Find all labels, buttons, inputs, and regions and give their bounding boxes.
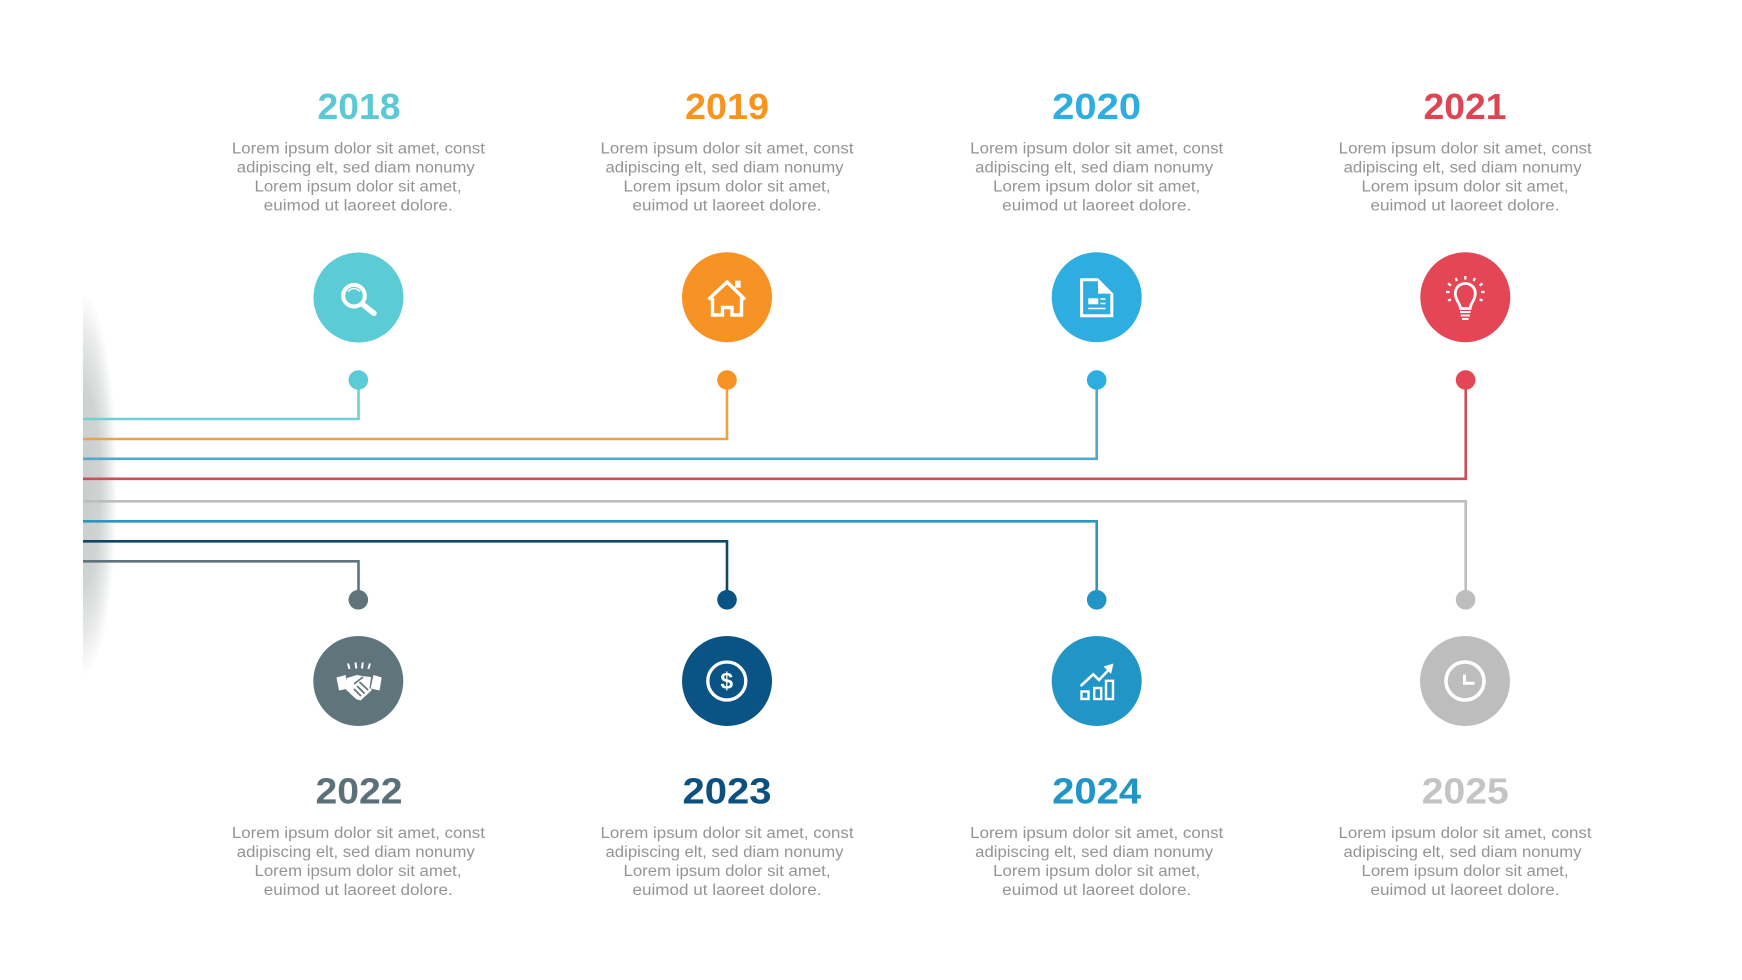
- text block: 2021: Lorem ipsum dolor sit amet, const: [1339, 140, 1592, 157]
- year: 2023: 2023: [682, 770, 772, 812]
- icon: magnifier in circle: [314, 252, 404, 342]
- year: 2018: 2018: [318, 86, 400, 127]
- connector: 2024: [83, 521, 1097, 600]
- connector: 2020: [83, 380, 1097, 459]
- connector: 2025: [83, 501, 1466, 600]
- text block: 2021: [1339, 140, 1592, 214]
- dot: 2020: [1087, 370, 1106, 390]
- icon: clock in circle: [1420, 636, 1510, 726]
- text block: 2024: Lorem ipsum dolor sit amet, const: [970, 825, 1224, 842]
- text block: 2025: euimod ut laoreet dolore.: [1370, 882, 1560, 899]
- source shadow at left edge: [83, 308, 114, 662]
- text block: 2024: Lorem ipsum dolor sit amet,: [993, 863, 1200, 880]
- text block: 2024: euimod ut laoreet dolore.: [1002, 882, 1191, 899]
- text block: 2020: [970, 140, 1224, 214]
- text block: 2019: euimod ut laoreet dolore.: [632, 197, 822, 214]
- icon: light bulb in circle: [1420, 252, 1510, 342]
- icon: house in circle: [682, 252, 772, 342]
- text block: 2018: [232, 140, 486, 214]
- icon: dollar coin in circle: [682, 636, 772, 726]
- text block: 2020: euimod ut laoreet dolore.: [1002, 197, 1191, 214]
- text block: 2021: euimod ut laoreet dolore.: [1370, 197, 1560, 214]
- text block: 2023: adipiscing elt, sed diam nonumy: [606, 844, 844, 861]
- connector: 2023: [83, 541, 727, 600]
- panel: 2025: [83, 501, 1592, 899]
- text block: 2022: Lorem ipsum dolor sit amet,: [254, 863, 462, 880]
- dot: 2019: [717, 370, 737, 390]
- panel: 2022: [83, 561, 486, 899]
- text block: 2024: adipiscing elt, sed diam nonumy: [975, 844, 1213, 861]
- panel: 2018: [83, 86, 486, 419]
- text block: 2022: adipiscing elt, sed diam nonumy: [237, 844, 475, 861]
- dot: 2021: [1456, 370, 1475, 390]
- panel: 2024: [83, 521, 1224, 899]
- text block: 2018: Lorem ipsum dolor sit amet,: [254, 178, 462, 195]
- connector: 2018: [83, 380, 358, 419]
- dot: 2018: [348, 370, 368, 390]
- icon: document in circle: [1052, 252, 1142, 342]
- text block: 2018: adipiscing elt, sed diam nonumy: [237, 159, 475, 176]
- text block: 2019: [600, 140, 854, 214]
- text block: 2018: euimod ut laoreet dolore.: [264, 197, 453, 214]
- text block: 2019: Lorem ipsum dolor sit amet, const: [600, 140, 854, 157]
- text block: 2025: adipiscing elt, sed diam nonumy: [1344, 844, 1582, 861]
- text block: 2023: [600, 825, 854, 899]
- text block: 2021: Lorem ipsum dolor sit amet,: [1362, 178, 1568, 195]
- text block: 2024: [970, 825, 1224, 899]
- text block: 2023: Lorem ipsum dolor sit amet, const: [600, 825, 854, 842]
- text block: 2020: Lorem ipsum dolor sit amet,: [993, 178, 1200, 195]
- dot: 2022: [348, 590, 368, 610]
- connector: 2021: [83, 380, 1466, 479]
- text block: 2020: Lorem ipsum dolor sit amet, const: [970, 140, 1224, 157]
- panel: 2019: [83, 86, 854, 439]
- text block: 2025: Lorem ipsum dolor sit amet,: [1362, 863, 1568, 880]
- connector: 2019: [83, 380, 727, 439]
- panel: 2020: [83, 86, 1224, 459]
- year: 2020: 2020: [1052, 86, 1141, 127]
- icon: growth chart in circle: [1052, 636, 1142, 726]
- icon: dollar coin in circle: $: [720, 668, 733, 694]
- text block: 2022: euimod ut laoreet dolore.: [264, 882, 453, 899]
- year: 2021: 2021: [1424, 86, 1506, 127]
- text block: 2023: Lorem ipsum dolor sit amet,: [624, 863, 830, 880]
- text block: 2019: Lorem ipsum dolor sit amet,: [624, 178, 830, 195]
- text block: 2022: [232, 825, 486, 899]
- text block: 2018: Lorem ipsum dolor sit amet, const: [232, 140, 486, 157]
- panel: 2023: [83, 541, 854, 899]
- connector: 2022: [83, 561, 358, 600]
- icon: handshake in circle: [313, 636, 403, 726]
- year: 2019: 2019: [685, 86, 769, 127]
- text block: 2025: [1338, 825, 1592, 899]
- year: 2025: 2025: [1422, 770, 1509, 812]
- year: 2024: 2024: [1052, 770, 1141, 812]
- text block: 2020: adipiscing elt, sed diam nonumy: [975, 159, 1213, 176]
- text block: 2021: adipiscing elt, sed diam nonumy: [1344, 159, 1582, 176]
- text block: 2023: euimod ut laoreet dolore.: [632, 882, 822, 899]
- text block: 2022: Lorem ipsum dolor sit amet, const: [232, 825, 486, 842]
- dot: 2023: [717, 590, 737, 610]
- dot: 2025: [1456, 590, 1475, 610]
- panel: 2021: [83, 86, 1592, 479]
- year: 2022: 2022: [316, 770, 402, 812]
- text block: 2025: Lorem ipsum dolor sit amet, const: [1338, 825, 1592, 842]
- text block: 2019: adipiscing elt, sed diam nonumy: [606, 159, 844, 176]
- dot: 2024: [1087, 590, 1106, 610]
